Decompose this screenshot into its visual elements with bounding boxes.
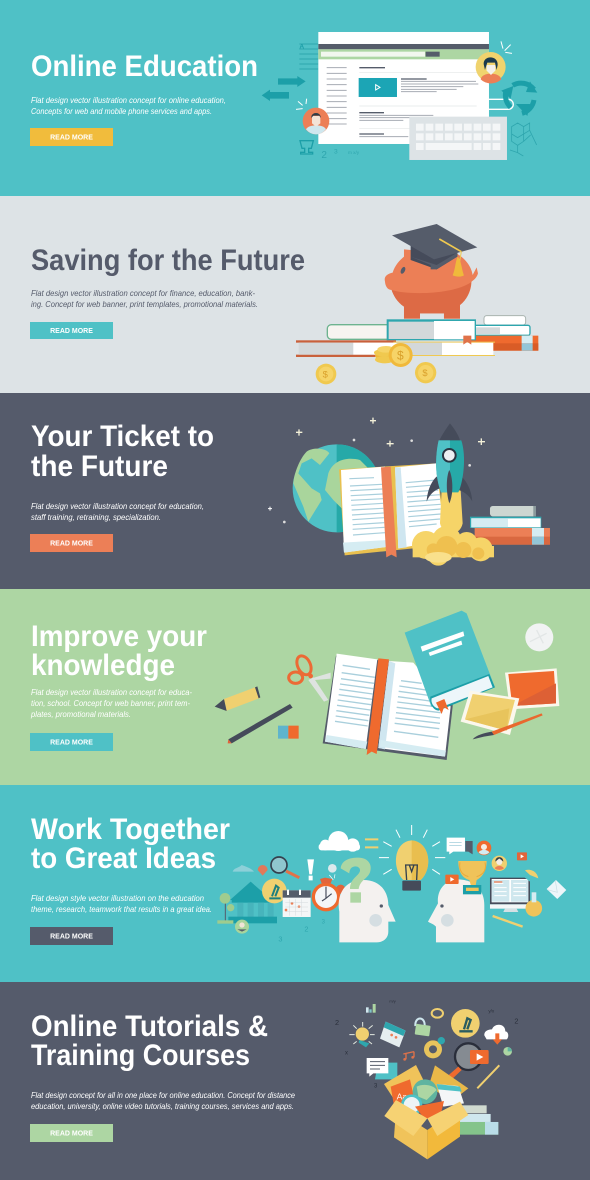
illustration: open box with learning icons: 2 <box>514 1016 518 1025</box>
title: improve your knowledge <box>31 620 207 682</box>
description: work together: Flat design style vector illustration on the education <box>31 893 204 903</box>
illustration: piggy bank with cap on books: $ <box>323 369 329 379</box>
description: saving <box>31 288 258 309</box>
description: tutorials: education, university, online video tutorials, training courses, services and apps. <box>31 1101 294 1111</box>
title: your ticket: Your Ticket to <box>31 420 214 453</box>
button: read more dark <box>30 927 113 945</box>
panel: improve your knowledge <box>0 589 590 785</box>
description: saving: ing. Concept for web banner, print templates, promotional materials. <box>31 299 258 309</box>
title: improve your knowledge: knowledge <box>31 649 175 682</box>
title: online tutorials: Online Tutorials & <box>31 1010 268 1043</box>
illustration: open book, notebook and stationery <box>215 611 559 760</box>
title: work together: to Great Ideas <box>31 842 216 875</box>
panel: saving for the future <box>0 196 590 393</box>
button: read more green: READ MORE <box>50 1130 93 1138</box>
title: online tutorials: Training Courses <box>31 1039 250 1072</box>
panel: online education <box>0 0 590 196</box>
description: ticket: Flat design vector illustration concept for education, <box>31 501 204 511</box>
title: improve your knowledge: Improve your <box>31 620 207 653</box>
button: read more teal: READ MORE <box>50 740 93 746</box>
description: online education <box>31 95 226 116</box>
title: your ticket <box>31 420 214 483</box>
illustration: open box with learning icons: y/x <box>488 1009 495 1014</box>
description: work together: theme, research, teamwork that results in a great idea. <box>31 904 212 914</box>
illustration: open box with learning icons: 2 <box>335 1018 339 1027</box>
illustration: browser window with keyboard: 3 <box>334 148 338 155</box>
button: read more orange <box>30 534 113 552</box>
description: saving: Flat design vector illustration concept for finance, education, bank- <box>31 288 255 298</box>
title: work together <box>31 813 231 875</box>
button: read more teal <box>30 733 113 751</box>
button: read more teal: READ MORE <box>50 328 93 335</box>
description: work together <box>31 893 212 914</box>
description: improve: plates, promotional materials. <box>30 709 131 719</box>
title: online education: Online Education <box>31 50 258 83</box>
description: online education: Concepts for web and mobile phone services and apps. <box>31 106 212 116</box>
illustration: piggy bank with cap on books <box>296 224 538 384</box>
illustration: browser window with keyboard: A <box>299 44 304 51</box>
illustration: open box with learning icons: m/y <box>389 999 396 1004</box>
illustration: two heads and idea icons: 3 <box>278 935 282 944</box>
illustration: browser window with keyboard: 2 <box>321 150 327 161</box>
illustration: browser window with keyboard: m x/y <box>348 150 360 155</box>
illustration: open box with learning icons <box>335 999 518 1159</box>
button: read more yellow <box>30 128 113 146</box>
title: work together: Work Together <box>31 813 231 846</box>
illustration: piggy bank with cap on books: $ <box>422 368 428 378</box>
illustration: open box with learning icons: 3 <box>374 1083 378 1089</box>
description: ticket <box>31 501 204 522</box>
button: read more teal <box>30 322 113 339</box>
button: read more dark: READ MORE <box>50 934 93 940</box>
illustration: piggy bank with cap on books: $ <box>397 348 404 362</box>
panel: your ticket to the future <box>0 393 590 589</box>
illustration: globe, open book and rocket <box>268 418 550 566</box>
title: online tutorials <box>31 1010 268 1072</box>
title: your ticket: the Future <box>31 450 168 483</box>
description: tutorials: Flat design concept for all in one place for online education. Concept for distance <box>31 1090 295 1100</box>
description: improve: Flat design vector illustration concept for educa- <box>31 687 192 697</box>
description: online education: Flat design vector illustration concept for online education, <box>31 95 226 105</box>
panel: online tutorials <box>0 982 590 1180</box>
panel: work together <box>0 785 590 982</box>
illustration: browser window with keyboard <box>262 32 537 161</box>
button: read more green <box>30 1124 113 1142</box>
title: saving for the future: Saving for the Future <box>31 244 305 277</box>
button: read more orange: READ MORE <box>50 540 93 548</box>
button: read more yellow: READ MORE <box>50 134 93 142</box>
description: tutorials <box>31 1090 295 1111</box>
description: improve: tion, school. Concept for web banner, print tem- <box>31 698 190 708</box>
illustration: open box with learning icons: x <box>345 1050 348 1056</box>
illustration: two heads and idea icons <box>217 825 566 944</box>
description: improve <box>30 687 192 719</box>
illustration: two heads and idea icons: 3 <box>322 920 326 926</box>
illustration: two heads and idea icons: 2 <box>304 925 308 934</box>
illustration: open box with learning icons: Aa <box>397 1091 407 1101</box>
description: ticket: staff training, retraining, specialization. <box>31 512 161 522</box>
